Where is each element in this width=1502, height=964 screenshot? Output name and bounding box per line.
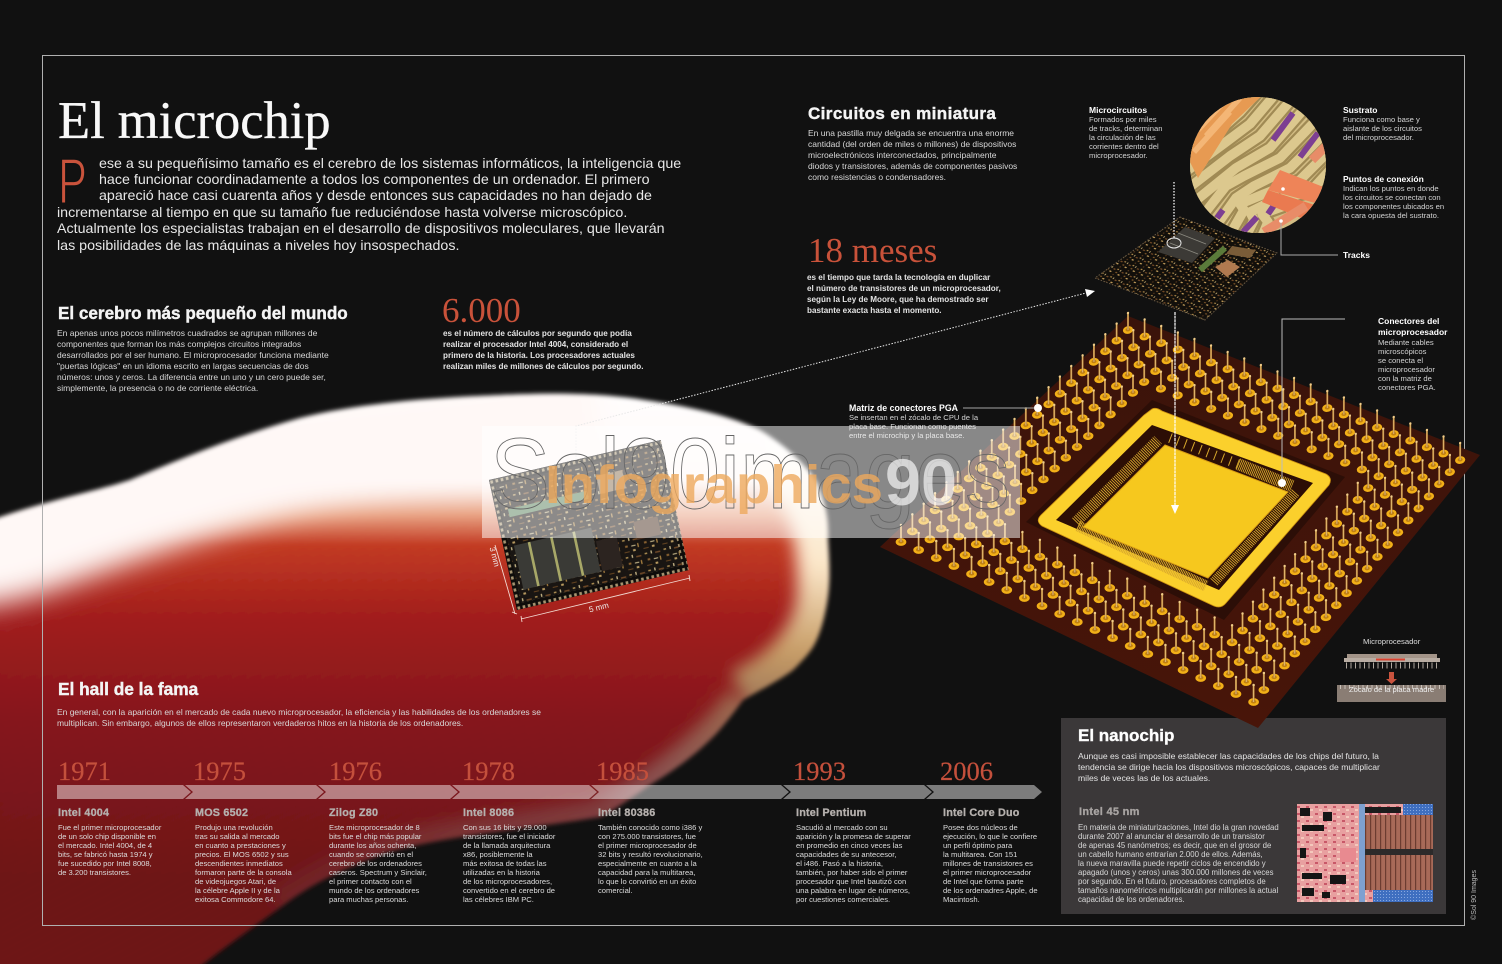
timeline item: 1993: por cuestiones comerciales.	[796, 895, 890, 904]
timeline item: 1976: durante los años ochenta,	[329, 841, 416, 850]
intro paragraph: hace funcionar coordinadamente a todos los componentes de un ordenador. El primero	[99, 172, 650, 188]
stat: 18 meses: 18 meses	[808, 231, 937, 270]
yellow die	[1083, 445, 1288, 578]
text: el cerebro: "puertas lógicas" en un idioma escrito en largas secuencias de dos	[57, 361, 309, 371]
callout: sustrato: aislante de los circuitos	[1343, 124, 1422, 133]
timeline item: 1993: procesador que Intel bautizó con	[796, 877, 906, 886]
timeline item: 1971: de un solo chip disponible en	[58, 832, 156, 841]
callout: microcircuitos: de tracks, determinan	[1089, 124, 1162, 133]
text: el cerebro: desarrollados por el ser humano. El microprocesador funciona mediante	[57, 350, 329, 360]
timeline item: 1976	[329, 756, 427, 904]
text: 6.000: realizan miles de millones de cálculos por segundo.	[443, 362, 643, 371]
callout: conectores del microprocesador: microprocesador	[1378, 365, 1435, 374]
timeline item: 1993: Sacudió al mercado con su	[796, 822, 888, 832]
intro paragraph: ese a su pequeñísimo tamaño es el cerebro de los sistemas informáticos, la inteligencia que	[99, 156, 681, 172]
timeline item: 1985: comercial.	[598, 886, 633, 895]
callout: conectores del microprocesador: con la matriz de	[1378, 374, 1432, 383]
timeline item: 1993: en promedio en cinco veces las	[796, 841, 902, 850]
timeline item: 1978: más exitosa de todas las	[463, 859, 547, 868]
timeline item: 1975: de videojuegos Atari, de	[195, 877, 276, 886]
socket diagram	[1337, 654, 1446, 702]
timeline item: 1978: Con sus 16 bits y 29.000	[463, 822, 547, 832]
label: 5 mm: 5 mm	[588, 601, 610, 614]
stat: 6.000: 6.000	[442, 291, 521, 330]
text: el cerebro: En apenas unos pocos milímetros cuadrados se agrupan millones de	[57, 328, 317, 338]
text: intel 45 nm: de apenas 45 nanómetros; es decir, que en el grosor de	[1078, 841, 1271, 850]
timeline item: 1993	[793, 756, 911, 904]
timeline item: 2006	[940, 756, 1038, 904]
text: 18 meses: el número de transistores de un microprocesador,	[807, 284, 1001, 292]
timeline item: 1975: descendientes inmediatos	[195, 859, 283, 868]
timeline item: 1993: Intel Pentium	[796, 807, 866, 819]
text: intel 45 nm: En materia de miniaturizaciones, Intel dio la gran novedad	[1078, 822, 1279, 832]
timeline item: 1985: especialmente en cuanto a la	[598, 859, 697, 868]
timeline item: 1976: mundo de los ordenadores	[329, 886, 419, 895]
timeline arrow	[57, 785, 1042, 799]
drop cap: P	[58, 145, 87, 217]
text: circuitos en miniatura: como resistencias o condensadores.	[808, 172, 946, 182]
heading: circuitos en miniatura: Circuitos en miniatura	[808, 104, 996, 123]
leader: microcircuitos	[1173, 182, 1175, 238]
timeline item: 1976: 1976	[329, 756, 382, 786]
chip detail, upper right	[1095, 217, 1277, 320]
watermark: Sol90images	[490, 418, 1010, 530]
timeline item: 1971: Intel 4004	[58, 807, 109, 819]
timeline item: 1985: con 275.000 transistores, fue	[598, 832, 696, 841]
callout: microcircuitos	[1089, 105, 1162, 160]
heading: el cerebro: El cerebro más pequeño del mundo	[58, 304, 348, 323]
callout: conectores del microprocesador: microscópicos	[1378, 347, 1426, 356]
text: 18 meses: bastante exacta hasta el momento.	[807, 306, 942, 314]
timeline item: 1975: formaron parte de la consola	[195, 868, 292, 877]
timeline item: 2006: millones de transistores es	[943, 859, 1033, 868]
timeline item: 1975: exitosa Commodore 64.	[195, 895, 276, 904]
timeline item: 1993: capacidades de su antecesor,	[796, 850, 896, 859]
text: 6.000: primero de la historia. Los procesadores actuales	[443, 351, 635, 360]
heading: el nanochip: El nanochip	[1078, 726, 1174, 745]
text: 6.000: realizar el procesador Intel 4004, considerado el	[443, 340, 628, 349]
callout: puntos de conexión: la cara opuesta del sustrato.	[1343, 211, 1439, 220]
credit: ©Sol 90 Images	[1471, 870, 1478, 920]
timeline item: 1978: de la llamada arquitectura	[463, 841, 550, 850]
timeline item: 1971: Fue el primer microprocesador	[58, 822, 161, 832]
callout: matriz de conectores: placa base. Funcionan como puentes	[849, 422, 976, 431]
timeline item: 1975: tras su salida al mercado	[195, 832, 279, 841]
label: zócalo: Zócalo de la placa madre	[1349, 685, 1434, 694]
text: circuitos en miniatura: microelectrónicos interconectados, principalmente	[808, 150, 997, 160]
timeline item: 1978: utilizadas en la historia	[463, 868, 540, 877]
text: el nanochip: tendencia se dirige hacia los dispositivos microscópicos, capaces de multiplicar	[1078, 762, 1380, 772]
text: intel 45 nm	[1078, 822, 1279, 904]
gold ring	[1038, 408, 1330, 607]
subheading: intel 45 nm: Intel 45 nm	[1079, 806, 1140, 818]
label: microprocesador: Microprocesador	[1363, 637, 1420, 646]
timeline item: 2006: de Intel que forma parte	[943, 877, 1024, 886]
text: el nanochip: miles de veces las de los actuales.	[1078, 772, 1210, 782]
callout: microcircuitos: corrientes dentro del	[1089, 142, 1159, 151]
timeline item: 2006: Macintosh.	[943, 895, 980, 904]
callout: microcircuitos: Microcircuitos	[1089, 105, 1147, 115]
callout: conectores del microprocesador: conectores PGA.	[1378, 383, 1436, 392]
text: el cerebro: simplemente, la presencia o no de corriente eléctrica.	[57, 383, 258, 393]
timeline item: 1978: las célebres IBM PC.	[463, 895, 534, 904]
timeline item: 1975: 1975	[193, 756, 246, 786]
pin cavity step	[1026, 400, 1345, 620]
timeline item: 1993: aparición y la promesa de superar	[796, 832, 911, 841]
callout: sustrato: del microprocesador.	[1343, 133, 1414, 142]
leader: dotted link from fingertip chip	[576, 293, 1086, 460]
callout: conectores del microprocesador: se conecta el	[1378, 356, 1423, 365]
timeline item: 1976: cerebro de los ordenadores	[329, 859, 422, 868]
timeline item: 1978: Intel 8086	[463, 807, 514, 819]
timeline item: 1975: precios. El MOS 6502 y sus	[195, 850, 289, 859]
package base	[880, 316, 1480, 728]
leader lines and markers	[576, 182, 1345, 505]
text: 18 meses: es el tiempo que tarda la tecnología en duplicar	[807, 272, 990, 282]
timeline item: 1971: fue sucedido por Intel 8008,	[58, 859, 152, 868]
text: intel 45 nm: apagado (unos y ceros) unas 300.000 millones de veces	[1078, 868, 1273, 877]
timeline item: 1976: bits fue el chip más popular	[329, 832, 421, 841]
dimension lines	[495, 545, 690, 622]
timeline item: 1971: 1971	[58, 756, 111, 786]
intro paragraph: apareció hace casi cuarenta años y desde entonces sus capacidades no han dejado de	[99, 188, 652, 204]
timeline item: 1978: convertido en el cerebro de	[463, 886, 555, 895]
timeline item: 2006: un perfil óptimo para	[943, 841, 1012, 850]
watermark: Infographics	[545, 455, 883, 515]
text: el nanochip: Aunque es casi imposible establecer las capacidades de los chips del futuro, la	[1078, 750, 1379, 760]
callout: conectores del microprocesador: Conectores del	[1378, 316, 1439, 326]
timeline item: 2006: ejecución, lo que le confiere	[943, 832, 1037, 841]
timeline item: 1985: 1985	[596, 756, 649, 786]
callout: puntos de conexión	[1343, 174, 1444, 220]
timeline item: 2006: de los ordenadres Apple, de	[943, 886, 1038, 895]
callout: sustrato: Funciona como base y	[1343, 115, 1420, 124]
heading: hall de la fama: El hall de la fama	[58, 679, 198, 699]
timeline item: 1976: cuando se convirtió en el	[329, 850, 413, 859]
callout: matriz de conectores	[849, 403, 978, 440]
title: El microchip	[58, 92, 331, 150]
text: 6.000	[443, 329, 643, 371]
text: circuitos en miniatura	[808, 128, 1017, 182]
text: intel 45 nm: tamaños nanométricos multiplicarán por millones la actual	[1078, 886, 1278, 895]
timeline item: 1975: Produjo una revolución	[195, 822, 273, 832]
timeline item: 1971: el mercado. Intel 4004, de 4	[58, 841, 152, 850]
leader: matriz	[963, 407, 1034, 409]
timeline item: 2006: Intel Core Duo	[943, 807, 1020, 819]
callout: tracks: Tracks	[1343, 250, 1370, 260]
intro paragraph: incrementarse al tiempo en que su tamaño fue reduciéndose hasta volverse microscópico.	[57, 205, 627, 221]
panel: el nanochip background	[1061, 718, 1446, 914]
text: hall de la fama: multiplican. Sin embargo, algunos de ellos representaron verdaderos hitos en la historia de los ordenadores.	[57, 718, 463, 728]
callout: puntos de conexión: Indican los puntos en donde	[1343, 184, 1439, 193]
timeline item: 2006: la multitarea. Con 151	[943, 850, 1017, 859]
magnified circuit circle	[1190, 97, 1326, 233]
text: hall de la fama	[57, 706, 541, 728]
pin array	[896, 281, 1465, 706]
timeline item: 1976: para muchas personas.	[329, 895, 408, 904]
leader: conectores	[1282, 319, 1345, 483]
text: intel 45 nm: la nueva maravilla puede repetir ciclos de encendido y	[1078, 859, 1266, 868]
intro paragraph: Actualmente los especialistas trabajan en el desarrollo de dispositivos moleculares, que llevarán	[57, 221, 665, 237]
text: circuitos en miniatura: diodos y transistores, además de componentes pasivos	[808, 160, 1017, 170]
timeline item: 1985: lo que lo convirtió en un éxito	[598, 877, 696, 886]
timeline item: 1993: 1993	[793, 756, 846, 786]
marker dots and arrowheads	[1034, 187, 1286, 514]
timeline item: 1975: en cuanto a prestaciones y	[195, 841, 286, 850]
text: circuitos en miniatura: En una pastilla muy delgada se encuentra una enorme	[808, 128, 1014, 138]
leader: tracks	[1281, 222, 1338, 255]
nanochip die photo	[1297, 804, 1433, 902]
intro paragraph	[57, 156, 681, 254]
timeline item: 1978: de los microprocesadores,	[463, 877, 552, 886]
text: el cerebro	[57, 328, 329, 393]
microprocessor: package with pin grid array	[880, 281, 1480, 728]
callout: matriz de conectores: entre el microchip y la placa base.	[849, 431, 965, 440]
text: hall de la fama: En general, con la aparición en el mercado de cada nuevo microprocesador, la eficiencia y las habilidades de los ordenadores se	[57, 706, 541, 716]
timeline item: 1975: la célebre Apple II y de la	[195, 886, 280, 895]
timeline item: 1993: el i486. Pasó a la historia,	[796, 859, 883, 868]
arrow: chip to die	[1174, 312, 1176, 505]
text: intel 45 nm: por segundo. En el futuro, procesadores completos de	[1078, 877, 1266, 886]
timeline item: 1993: una palabra en lugar de números,	[796, 886, 910, 895]
intro paragraph: las posibilidades de las máquinas a niveles hoy insospechados.	[57, 238, 459, 254]
timeline item: 1975: MOS 6502	[195, 807, 248, 819]
timeline item: 2006: Posee dos núcleos de	[943, 822, 1018, 832]
callout: puntos de conexión: Puntos de conexión	[1343, 174, 1424, 184]
label: 3 mm: 3 mm	[488, 546, 501, 568]
timeline item: 1971: de 3.200 transistores.	[58, 868, 131, 877]
callout: sustrato	[1343, 105, 1422, 142]
timeline item: 1971: bits, se fabricó hasta 1974 y	[58, 850, 153, 859]
text: 18 meses	[807, 272, 1001, 314]
timeline item: 1978: transistores, fue el iniciador	[463, 832, 555, 841]
callout: matriz de conectores: Se insertan en el zócalo de CPU de la	[849, 413, 978, 422]
timeline item: 1993: también, por haber sido el primer	[796, 868, 907, 877]
callout: matriz de conectores: Matriz de conectores PGA	[849, 403, 958, 413]
text: 18 meses: según la Ley de Moore, que ha demostrado ser	[807, 294, 989, 304]
timeline item: 1985: También conocido como i386 y	[598, 822, 702, 832]
callout: conectores del microprocesador: microprocesador	[1378, 327, 1447, 337]
callout: puntos de conexión: los circuitos se conectan con	[1343, 193, 1441, 202]
timeline item: 1978: 1978	[462, 756, 515, 786]
text: intel 45 nm: un cabello humano entrarían 2.000 de ellos. Además,	[1078, 850, 1263, 859]
timeline item: 1978	[462, 756, 556, 904]
cavity	[1056, 425, 1313, 590]
timeline item: 1985: Intel 80386	[598, 807, 655, 819]
callout: microcircuitos: Formados por miles	[1089, 115, 1157, 124]
text: 6.000: es el número de cálculos por segundo que podía	[443, 329, 632, 338]
text: intel 45 nm: durante 2007 al anunciar el desarrollo de un transistor	[1078, 832, 1265, 841]
text: el cerebro: números: unos y ceros. La diferencia entre un uno y un cero puede ser,	[57, 372, 326, 382]
callout: conectores del microprocesador: Mediante cables	[1378, 338, 1434, 347]
timeline item: 1976: Este microprocesador de 8	[329, 822, 420, 832]
timeline item: 1971	[58, 756, 162, 877]
timeline item: 1985: capacidad para la multitarea,	[598, 868, 696, 877]
callout: puntos de conexión: los componentes ubicados en	[1343, 202, 1444, 211]
text: el cerebro: componentes que forman los más complejos circuitos integrados	[57, 339, 301, 349]
watermark: 90	[885, 445, 957, 519]
timeline item: 1975	[193, 756, 292, 904]
timeline item: 1976: Zilog Z80	[329, 807, 378, 819]
callout: microcircuitos: la circulación de las	[1089, 133, 1156, 142]
timeline item: 2006: el primer microprocesador	[943, 868, 1031, 877]
timeline item: 1985: 32 bits y resultó revolucionario,	[598, 850, 703, 859]
timeline item: 1976: caseros. Spectrum y Sinclair,	[329, 868, 427, 877]
callout: sustrato: Sustrato	[1343, 105, 1377, 115]
timeline item: 1978: x86, posiblemente la	[463, 850, 533, 859]
chip on fingertip	[489, 440, 690, 622]
finger photograph	[0, 370, 860, 964]
text: circuitos en miniatura: cantidad (del orden de miles o millones) de dispositivos	[808, 138, 1016, 148]
callout: conectores del microprocesador	[1378, 316, 1448, 392]
timeline item: 2006: 2006	[940, 756, 993, 786]
timeline item: 1976: el primer contacto con el	[329, 877, 412, 886]
timeline item: 1985: el primer microprocesador de	[598, 841, 697, 850]
text: el nanochip	[1078, 750, 1380, 782]
timeline item: 1985	[596, 756, 703, 895]
text: intel 45 nm: capacidad de los ordenadores.	[1078, 895, 1185, 904]
bond wires	[1076, 438, 1296, 586]
callout: microcircuitos: microprocesador.	[1089, 151, 1148, 160]
